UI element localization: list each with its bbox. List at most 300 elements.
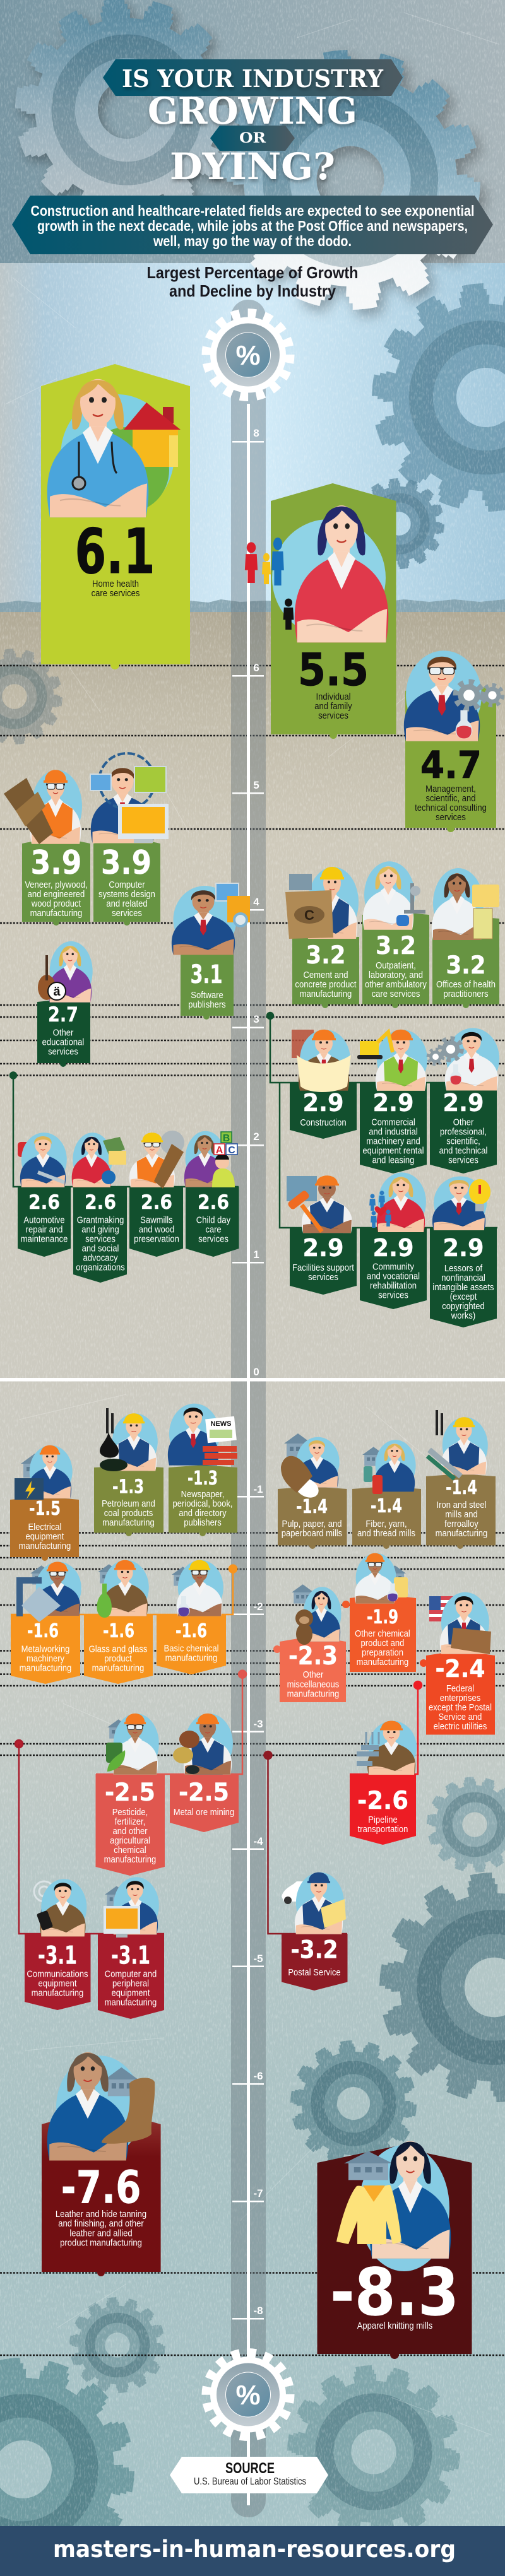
panel: -1.6 glass: manufacturing [92, 1662, 144, 1673]
panel: -1.9 other chemical: -1.9 [367, 1606, 398, 1628]
panel: -2.3 other miscellaneous: manufacturing [287, 1688, 339, 1699]
title: growing: GROWING [148, 90, 357, 132]
panel: 3.2 cement and concrete [292, 937, 359, 1008]
panel: 2.6 child day care: 2.6 [198, 1191, 229, 1214]
icon: puppet woman [292, 1584, 341, 1645]
panel: -1.9 other chemical [342, 1594, 416, 1672]
icon: metalworker [16, 1562, 81, 1622]
title: dying: DYING? [170, 145, 335, 188]
dotted grid lines [0, 666, 505, 2355]
panel: 3.9 computer systems design: Computer [109, 879, 145, 890]
axis: percentage scale: -2 [253, 1601, 263, 1613]
panel: 4.7 management scientific technical [405, 678, 496, 832]
panel: 2.9 other professional: Other [453, 1117, 473, 1127]
panel: 2.9 construction: Construction [300, 1117, 347, 1127]
axis: percentage scale: -5 [253, 1953, 263, 1965]
panel: 3.9 veneer plywood: 3.9 [30, 844, 82, 882]
panel: 3.2 outpatient laboratory: other ambulatory [365, 979, 427, 989]
connector: -1.6 group [11, 1565, 237, 1614]
icon: sawmill worker [129, 1131, 184, 1189]
panel: 2.9 lessors: works) [451, 1310, 475, 1320]
icon: nurse with house [47, 379, 181, 517]
panel: 2.9 community vocational [360, 1228, 427, 1309]
panel: -2.4 federal enterprises: except the Postal [429, 1702, 492, 1712]
panel: -3.1 communications: Communications [27, 1968, 88, 1979]
axis: percentage scale: -1 [253, 1483, 263, 1495]
panel: 3.2 offices of health practitioners [432, 916, 499, 1008]
panel: 2.6 sawmills: preservation [134, 1233, 179, 1244]
panel: -1.3 newspaper publishers: -1.3 [187, 1467, 218, 1490]
axis: percentage scale: -7 [253, 2187, 263, 2199]
panel: 3.2 cement and concrete: concrete product [295, 979, 357, 989]
panel: -1.6 metalworking [11, 1615, 80, 1684]
icon: percent gear bottom [206, 2353, 290, 2437]
icon: lab woman [363, 861, 425, 930]
panel: 3.9 veneer plywood: manufacturing [30, 907, 82, 918]
gear: ground left [0, 650, 61, 743]
panel: -2.5 pesticide fertilizer: and other [112, 1825, 148, 1836]
panel: 2.6 sawmills: and wood [139, 1224, 174, 1235]
panel: -1.4 pulp paper: paperboard mills [282, 1527, 342, 1538]
panel: -1.9 other chemical: manufacturing [357, 1656, 408, 1667]
panel: 3.2 outpatient laboratory [362, 912, 429, 1008]
panel: 2.6 automotive: maintenance [21, 1233, 68, 1244]
icon: day care woman and child: C [228, 1145, 235, 1156]
panel: -1.4 iron and steel: Iron and steel [436, 1499, 487, 1510]
panel: -8.3 apparel knitting [317, 2146, 472, 2359]
panel: -1.4 fiber yarn: -1.4 [371, 1495, 402, 1517]
icon: computer worker [104, 1877, 159, 1938]
panel: 5.5 individual and family [271, 483, 396, 739]
panel: 3.2 cement and concrete: Cement and [303, 969, 348, 980]
icon: software man [172, 883, 250, 955]
source ribbon: SOURCE [225, 2460, 275, 2477]
background: jagged horizon [0, 599, 505, 612]
footer bar: masters-in-human-resources.org [53, 2536, 456, 2563]
panel: 2.9 other professional: scientific, [446, 1136, 480, 1146]
panel: -1.4 pulp paper: -1.4 [296, 1496, 328, 1518]
panel: 3.2 outpatient laboratory: Outpatient, [376, 960, 416, 970]
panel: 2.9 commercial machinery: machinery and [366, 1136, 420, 1146]
panel: -2.5 pesticide fertilizer: fertilizer, [115, 1816, 145, 1826]
panel: 3.9 veneer plywood: and engineered [28, 888, 85, 899]
panel: -1.6 glass: Glass and glass [89, 1644, 147, 1654]
panel: -1.3 petroleum and coal: -1.3 [112, 1476, 144, 1498]
panel: -2.5 pesticide fertilizer: chemical [114, 1844, 146, 1855]
panel: -1.3 petroleum and coal: coal products [104, 1507, 153, 1518]
panel: 2.9 lessors: intangible assets [432, 1281, 494, 1292]
panel: -2.3 other miscellaneous: Other [303, 1669, 323, 1679]
panel: 2.6 grantmaking: and social [82, 1243, 119, 1254]
gear: bottom small [71, 2298, 164, 2392]
icon: teacher woman [38, 941, 93, 1003]
panel: -1.9 other chemical: Other chemical [355, 1628, 410, 1638]
panel: 2.9 community vocational: services [378, 1290, 408, 1300]
gear: bottom right [290, 2368, 458, 2536]
icon: day care woman and child: A [216, 1145, 223, 1156]
icon: communications worker [34, 1879, 86, 1936]
gear: large header right [224, 54, 477, 306]
panel: -1.6 metalworking: -1.6 [27, 1620, 59, 1642]
panel: -7.6 leather: leather and allied [69, 2228, 133, 2238]
panel: 2.6 automotive: 2.6 [28, 1191, 60, 1214]
panel: 2.9 other professional: professional, [440, 1126, 487, 1137]
panel: 3.2 outpatient laboratory: laboratory, and [369, 969, 423, 980]
axis: percentage scale: 0 [253, 1366, 259, 1378]
connector: 2.6 group [10, 1073, 239, 1187]
panel: -2.5 pesticide fertilizer: Pesticide, [112, 1806, 148, 1817]
connector: -3.1 group [15, 1740, 164, 1934]
panel: -7.6 leather: and finishing, and other [58, 2218, 144, 2228]
panel: -2.4 federal enterprises: Federal [446, 1683, 474, 1693]
icon: scientist [428, 1028, 499, 1091]
panel: -3.1 computer peripheral [98, 1934, 164, 2019]
background: ground [0, 612, 505, 2526]
background: sky [0, 263, 505, 612]
icon: glass worker [97, 1560, 149, 1618]
icon: percent gear top: % [235, 340, 261, 371]
panel: -8.3 apparel knitting: Apparel knitting mills [357, 2320, 432, 2331]
chart heading [146, 263, 359, 300]
panel: -3.1 computer peripheral: peripheral [112, 1978, 149, 1989]
icon: machinery man [357, 1030, 427, 1091]
panel: -1.6 glass: -1.6 [103, 1620, 134, 1642]
panel: -3.1 communications: -3.1 [38, 1942, 77, 1970]
panel: 2.6 sawmills: 2.6 [141, 1191, 172, 1214]
panel: 2.6 grantmaking: services [85, 1233, 116, 1244]
gear: lower right small [428, 1778, 505, 1871]
panel: -7.6 leather [42, 2107, 161, 2276]
panel: 2.9 commercial machinery: and industrial [369, 1126, 418, 1137]
connector: -2.5 group [96, 1671, 246, 1774]
icon: grantmaker woman [72, 1132, 126, 1187]
panel: -1.4 pulp paper: Pulp, paper, and [282, 1518, 342, 1529]
panel: -1.6 basic chemical [157, 1615, 226, 1674]
panel: -2.6 pipeline: transportation [358, 1823, 408, 1834]
panel: -1.4 iron and steel: manufacturing [436, 1527, 487, 1538]
source ribbon: U.S. Bureau of Labor Statistics [194, 2476, 306, 2487]
panel: -1.4 iron and steel: -1.4 [446, 1477, 477, 1499]
panel: -2.4 federal enterprises: Service and [439, 1711, 482, 1722]
panel: -1.4 iron and steel: ferroalloy [444, 1518, 478, 1529]
panel: 3.9 computer systems design: 3.9 [101, 844, 152, 882]
panel: 2.9 other professional [430, 1083, 497, 1173]
panel: 2.9 other professional: services [448, 1155, 478, 1165]
icon: day care woman and child [184, 1131, 237, 1187]
icon: lessor man with bulb [432, 1176, 490, 1230]
icon: woman holding family [245, 505, 388, 642]
chart heading: Largest Percentage of Growth [146, 263, 359, 282]
axis: percentage scale: -8 [253, 2305, 263, 2317]
icon: textile woman [362, 1440, 416, 1494]
panel: 2.6 grantmaking: advocacy [83, 1252, 118, 1263]
title: or ribbon: OR [239, 130, 266, 146]
panel: -3.1 communications [25, 1934, 91, 2010]
panel: 2.9 commercial machinery: Commercial [371, 1117, 415, 1127]
panel: 2.9 lessors: (except [450, 1291, 477, 1302]
icon: cement worker [285, 867, 359, 939]
icon: miner [173, 1714, 233, 1775]
panel: -1.6 basic chemical: manufacturing [165, 1652, 217, 1663]
panel: 2.9 lessors: copyrighted [442, 1300, 485, 1311]
icon: federal worker [429, 1592, 491, 1654]
panel: -1.6 glass [84, 1615, 153, 1684]
connector: -3.2 group [264, 1751, 347, 1934]
panel: -1.5 electrical equipment: -1.5 [29, 1498, 61, 1520]
panel: -1.5 electrical equipment: manufacturing [19, 1540, 71, 1551]
panel: -2.4 federal enterprises: electric utilities [434, 1720, 487, 1731]
axis: percentage scale: 4 [253, 896, 259, 908]
icon: woman with boot [47, 2052, 155, 2161]
panel: 3.2 outpatient laboratory: care services [372, 988, 420, 999]
panel: 2.7 other educational: 2.7 [48, 1003, 78, 1026]
panel: -3.1 computer peripheral: -3.1 [111, 1942, 150, 1970]
panel: -1.4 fiber yarn: and thread mills [357, 1527, 415, 1538]
panel: 3.9 veneer plywood [22, 837, 90, 926]
panel: -3.2 postal service: -3.2 [290, 1936, 338, 1965]
intro ribbon: well, may go the way of the dodo. [153, 233, 352, 249]
panel: -1.3 newspaper publishers: publishers [184, 1517, 222, 1527]
panel: -2.6 pipeline [350, 1774, 416, 1845]
panel: 2.6 child day care: care [205, 1224, 222, 1235]
panel: 2.9 community vocational: rehabilitation [370, 1280, 417, 1291]
icon: teacher woman: ä [53, 985, 61, 999]
panel: 2.9 construction: 2.9 [303, 1089, 343, 1117]
axis: percentage scale: 5 [253, 779, 259, 791]
panel: 2.7 other educational: services [48, 1046, 78, 1057]
panel: 5.5 individual and family: services [318, 710, 348, 720]
panel: -1.4 pulp paper [278, 1486, 347, 1549]
footer bar [0, 2526, 505, 2576]
icon: pipeline worker [357, 1721, 417, 1775]
panel: 2.6 child day care: services [198, 1233, 229, 1244]
panel: 2.9 other professional: 2.9 [443, 1089, 484, 1117]
axis: percentage scale: 2 [253, 1131, 259, 1143]
icon: construction man [292, 1030, 351, 1092]
panel: 3.1 software publishers: publishers [188, 999, 226, 1009]
panel: -7.6 leather: -7.6 [61, 2161, 141, 2213]
panel: -1.5 electrical equipment: equipment [26, 1531, 64, 1541]
panel: 3.1 software publishers: 3.1 [191, 960, 222, 989]
panel: -2.3 other miscellaneous: miscellaneous [287, 1679, 339, 1690]
panel: -1.3 petroleum and coal: manufacturing [102, 1517, 155, 1527]
panel: -1.6 metalworking: Metalworking [21, 1644, 69, 1654]
source ribbon [170, 2457, 328, 2493]
panel: 6.1 home health care [41, 364, 190, 669]
panel: 2.9 lessors: nonfinancial [441, 1272, 485, 1283]
panel: -2.5 metal ore mining: Metal ore mining [174, 1806, 234, 1817]
panel: -1.3 newspaper publishers: and directory [179, 1507, 227, 1518]
panel: -1.3 newspaper publishers [169, 1465, 237, 1536]
gear: lower right large [383, 1876, 505, 2099]
axis: percentage scale: 6 [253, 662, 259, 674]
panel: 2.9 commercial machinery: equipment rental [362, 1145, 424, 1156]
background: header [0, 0, 505, 263]
panel: 4.7 management scientific technical: 4.7 [420, 743, 482, 787]
panel: 3.9 computer systems design: systems design [98, 888, 155, 899]
panel: -1.3 petroleum and coal: Petroleum and [102, 1498, 155, 1509]
panel: 2.9 lessors: 2.9 [443, 1234, 484, 1262]
panel: 2.6 child day care: Child day [196, 1214, 230, 1225]
icon: percent gear bottom: % [235, 2380, 261, 2411]
axis: percentage scale: -3 [253, 1718, 263, 1730]
panel: -3.1 computer peripheral: manufacturing [105, 1997, 157, 2008]
panel: 2.7 other educational: Other [53, 1027, 73, 1038]
icon: wood worker [4, 770, 82, 844]
icon: community woman [369, 1172, 426, 1232]
panel: 2.9 commercial machinery: 2.9 [372, 1089, 414, 1117]
panel: 2.9 facilities support: Facilities support [292, 1262, 354, 1273]
panel: 3.2 outpatient laboratory: 3.2 [376, 932, 416, 960]
panel: 2.7 other educational [37, 999, 90, 1067]
icon: postal worker [282, 1873, 346, 1934]
panel: 3.2 cement and concrete: 3.2 [306, 941, 346, 970]
panel: -3.1 communications: equipment [39, 1978, 77, 1989]
panel: -2.5 metal ore mining: -2.5 [179, 1779, 229, 1807]
panel: -1.6 metalworking: manufacturing [20, 1662, 71, 1673]
connector: 2.9 group [267, 1013, 497, 1228]
panel: 2.9 facilities support [290, 1228, 357, 1295]
icon: day care woman and child: B [223, 1133, 230, 1144]
panel: 3.2 offices of health practitioners: practitioners [443, 988, 489, 999]
title: or ribbon [210, 126, 295, 151]
panel: 2.9 commercial machinery [360, 1083, 427, 1173]
panel: 5.5 individual and family: and family [314, 700, 352, 711]
panel: -2.5 pesticide fertilizer: -2.5 [105, 1779, 155, 1807]
icon: woman with sweater [336, 2141, 451, 2271]
panel: -1.5 electrical equipment [10, 1497, 79, 1561]
panel: -1.3 petroleum and coal [94, 1466, 163, 1536]
panel: 2.7 other educational: educational [42, 1037, 84, 1047]
panel: -1.9 other chemical: preparation [362, 1647, 403, 1657]
icon: facilities man [287, 1175, 352, 1233]
icon: chemist woman [355, 1553, 408, 1604]
axis: percentage scale: 8 [253, 427, 259, 439]
icon: newspaper publisher: NEWS [211, 1420, 231, 1428]
icon: doctor woman [432, 868, 499, 940]
connector: -2.6 group [350, 1681, 422, 1774]
chart heading: and Decline by Industry [169, 281, 336, 300]
panel: 3.9 computer systems design [93, 837, 160, 926]
panel: 2.6 automotive: repair and [26, 1224, 62, 1235]
panel: 2.6 sawmills [129, 1187, 183, 1257]
title: is your industry ribbon: IS YOUR INDUSTRY [122, 64, 384, 93]
panel: 3.2 offices of health practitioners: Offices of health [436, 979, 496, 989]
panel: 4.7 management scientific technical: services [436, 811, 466, 822]
panel: -3.1 computer peripheral: Computer and [105, 1968, 157, 1979]
panel: -3.2 postal service [282, 1934, 347, 1991]
panel: 2.6 grantmaking: Grantmaking [77, 1214, 124, 1225]
panel: 2.9 community vocational: 2.9 [372, 1234, 414, 1262]
panel: 2.6 grantmaking [73, 1187, 127, 1283]
panel: -2.5 metal ore mining [170, 1774, 239, 1832]
panel: 6.1 home health care: 6.1 [74, 516, 155, 588]
icon: pesticide worker [106, 1714, 159, 1775]
icon: scientist man [404, 650, 502, 741]
panel: -7.6 leather: product manufacturing [60, 2237, 142, 2248]
panel: -2.4 federal enterprises: -2.4 [436, 1655, 485, 1683]
panel: 3.9 computer systems design: and related [106, 898, 148, 909]
panel: 2.9 facilities support: services [308, 1271, 338, 1282]
panel: -1.6 metalworking: machinery [27, 1653, 64, 1664]
panel: -7.6 leather: Leather and hide tanning [56, 2208, 146, 2219]
panel: 5.5 individual and family: 5.5 [298, 644, 369, 696]
panel: -2.6 pipeline: Pipeline [368, 1814, 398, 1825]
icon: petroleum worker [100, 1408, 158, 1471]
panel: 6.1 home health care: Home health [92, 578, 139, 589]
axis: percentage scale: -6 [253, 2070, 263, 2082]
axis: percentage scale: 3 [253, 1013, 259, 1025]
panel: 2.9 other professional: and technical [439, 1145, 487, 1156]
icon: computer man [90, 753, 169, 844]
panel: 3.1 software publishers [181, 951, 234, 1020]
panel: -2.4 federal enterprises [420, 1650, 495, 1735]
axis: percentage scale: 1 [253, 1249, 259, 1261]
panel: -1.3 newspaper publishers: Newspaper, [181, 1488, 224, 1499]
title: is your industry ribbon [103, 59, 403, 96]
icon: paper mill worker [281, 1433, 340, 1502]
panel: 2.6 grantmaking: 2.6 [85, 1191, 116, 1214]
panel: 2.6 grantmaking: and giving [81, 1224, 119, 1235]
panel: 2.9 facilities support: 2.9 [303, 1234, 343, 1262]
panel: -2.5 pesticide fertilizer: agricultural [110, 1835, 150, 1845]
icon: chemical worker [172, 1560, 223, 1616]
panel: -1.4 fiber yarn: Fiber, yarn, [365, 1518, 407, 1529]
panel: -1.4 iron and steel: mills and [445, 1509, 478, 1519]
panel: 4.7 management scientific technical: scientific, and [425, 792, 476, 803]
gear: bottom left [0, 2361, 131, 2576]
panel: 2.6 sawmills: Sawmills [140, 1214, 173, 1225]
panel: -1.9 other chemical: product and [361, 1637, 404, 1648]
icon: steel worker [427, 1410, 488, 1479]
panel: 3.9 veneer plywood: Veneer, plywood, [25, 879, 88, 890]
panel: 4.7 management scientific technical: Management, [425, 783, 476, 794]
panel: 6.1 home health care: care services [92, 587, 140, 598]
panel: -3.2 postal service: Postal Service [288, 1967, 341, 1977]
panel: 2.9 community vocational: and vocational [367, 1271, 420, 1281]
panel: -3.1 computer peripheral: equipment [112, 1987, 150, 1998]
panel: -2.5 pesticide fertilizer [96, 1774, 165, 1876]
panel: -1.6 glass: product [104, 1653, 132, 1664]
panel: 3.9 computer systems design: services [112, 907, 142, 918]
axis: percentage scale: -4 [253, 1835, 263, 1847]
icon: mechanic [18, 1132, 67, 1187]
panel: -3.1 communications: manufacturing [32, 1987, 83, 1998]
panel: -1.3 newspaper publishers: periodical, book, [173, 1498, 232, 1509]
panel: 5.5 individual and family: Individual [316, 691, 351, 702]
intro ribbon [12, 196, 493, 254]
panel: 3.2 offices of health practitioners: 3.2 [446, 951, 486, 980]
gear: lower center [292, 2042, 415, 2165]
panel: 2.9 lessors [430, 1228, 497, 1327]
panel: -1.4 iron and steel [426, 1474, 496, 1549]
panel: -2.6 pipeline: -2.6 [357, 1787, 408, 1815]
gear: large header left [18, 1, 235, 218]
gear: small sky [355, 479, 443, 568]
panel: 2.6 automotive [18, 1187, 71, 1257]
panel: -1.6 basic chemical: Basic chemical [164, 1643, 218, 1654]
panel: -1.4 fiber yarn [352, 1486, 421, 1549]
panel: 4.7 management scientific technical: technical consulting [415, 802, 487, 813]
gear: sky right [375, 286, 505, 509]
panel: 2.9 construction [290, 1083, 357, 1139]
panel: -8.3 apparel knitting: -8.3 [330, 2255, 459, 2331]
panel: 2.9 commercial machinery: and leasing [372, 1155, 414, 1165]
panel: 2.6 automotive: Automotive [23, 1214, 65, 1225]
icon: newspaper publisher [168, 1404, 237, 1466]
icon: cement worker: C [304, 907, 314, 923]
panel: -1.6 basic chemical: -1.6 [175, 1620, 207, 1642]
